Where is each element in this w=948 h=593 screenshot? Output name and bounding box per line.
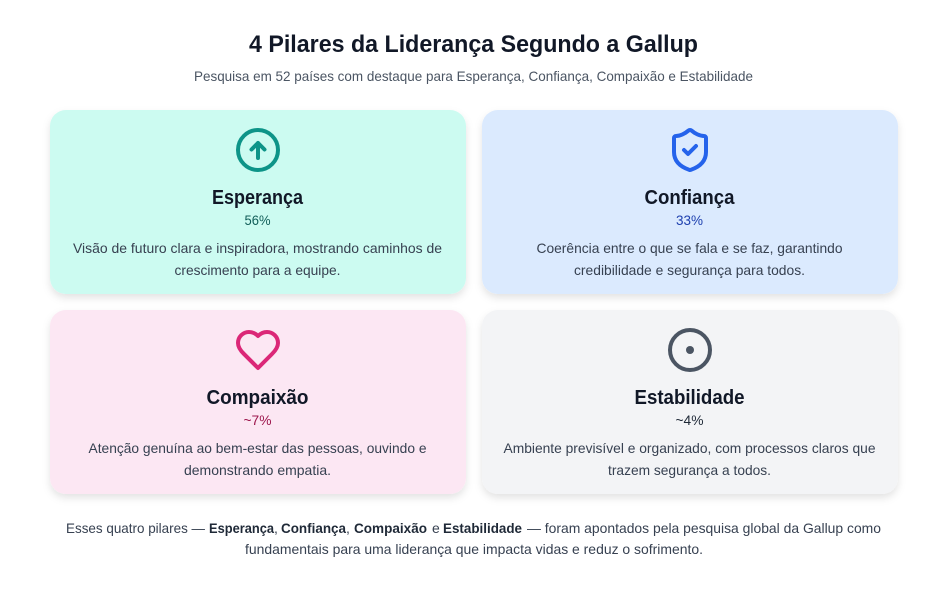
description [504, 440, 876, 478]
description: crescimento para a equipe. [174, 262, 340, 278]
description [73, 240, 442, 278]
description [536, 240, 843, 278]
footer text: e [432, 520, 440, 536]
panel: Confiança [482, 110, 898, 294]
footer text: Compaixão [354, 520, 427, 536]
icon: arrow up in circle [238, 130, 278, 170]
panel: Estabilidade [482, 310, 898, 494]
description [88, 440, 427, 478]
footer text: Esses quatro pilares — [66, 520, 205, 536]
title: 4 Pilares da Liderança Segundo a Gallup [249, 31, 698, 58]
heading: Compaixão: Compaixão [206, 387, 308, 409]
panel: Compaixão [50, 310, 466, 494]
description: demonstrando empatia. [184, 462, 331, 478]
description: Atenção genuína ao bem-estar das pessoas, ouvindo e [88, 440, 427, 456]
footer text: , [346, 520, 350, 536]
value: 33%: 33% [676, 212, 703, 228]
description: credibilidade e segurança para todos. [574, 262, 805, 278]
description: Coerência entre o que se fala e se faz, garantindo [536, 240, 843, 256]
description: trazem segurança a todos. [608, 462, 771, 478]
description: Visão de futuro clara e inspiradora, mostrando caminhos de [73, 240, 442, 256]
footer text: fundamentais para uma liderança que impacta vidas e reduz o sofrimento. [245, 541, 703, 557]
footer text: Esperança [209, 520, 274, 536]
footer text [66, 520, 881, 557]
icon: shield with check [674, 130, 706, 170]
panel: Esperança [50, 110, 466, 294]
icon: heart [238, 332, 278, 368]
value: ~4%: ~4% [676, 412, 704, 428]
value: ~7%: ~7% [244, 412, 272, 428]
footer text: Estabilidade [443, 520, 522, 536]
subtitle: Pesquisa em 52 países com destaque para Esperança, Confiança, Compaixão e Estabilidade [194, 68, 753, 84]
heading: Estabilidade: Estabilidade [634, 387, 744, 409]
footer text: — foram apontados pela pesquisa global da Gallup como [527, 520, 881, 536]
footer text: , [274, 520, 278, 536]
footer text: Confiança [281, 520, 346, 536]
icon: circle with dot [670, 330, 710, 370]
heading: Confiança: Confiança [644, 187, 735, 209]
heading: Esperança: Esperança [212, 187, 304, 209]
value: 56%: 56% [244, 212, 270, 228]
description: Ambiente previsível e organizado, com processos claros que [504, 440, 876, 456]
